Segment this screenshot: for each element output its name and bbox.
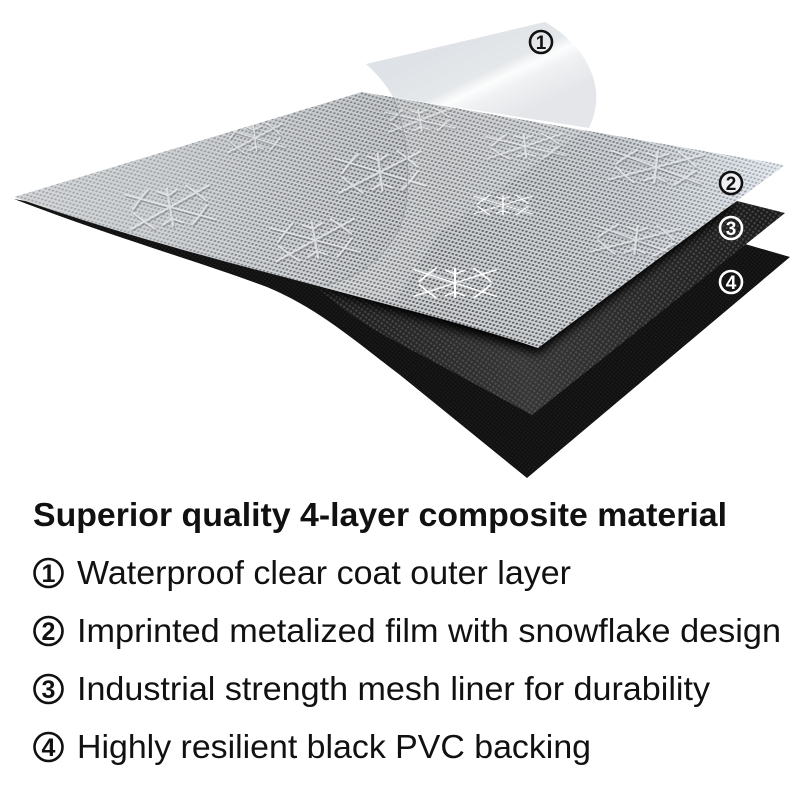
legend item 4: Highly resilient black PVC backing (77, 729, 591, 766)
marker 4 on PVC backing: 4 (726, 273, 737, 294)
legend item 1: 1 (42, 560, 56, 588)
legend item 3: Industrial strength mesh liner for durability (77, 671, 710, 708)
heading: Superior quality 4-layer composite material (33, 496, 727, 533)
layer 3: industrial mesh liner (300, 195, 785, 415)
marker 3 on mesh liner (720, 217, 742, 240)
legend item 2: Imprinted metalized film with snowflake design (77, 613, 781, 650)
marker 3 on mesh liner: 3 (726, 219, 736, 240)
marker 1 on clear film (530, 31, 552, 54)
legend item 4: 4 (42, 734, 56, 762)
legend item 1: Waterproof clear coat outer layer (77, 555, 571, 592)
marker 2 on metalized film (720, 172, 742, 195)
legend item 2: 2 (42, 618, 55, 646)
marker 2 on metalized film: 2 (726, 174, 736, 195)
layer 4: black PVC backing (14, 199, 790, 478)
marker 1 on clear film: 1 (536, 33, 547, 54)
layer 2: metalized film with snowflake design (14, 92, 785, 348)
snowflake imprints (125, 107, 704, 298)
clear film overlay on the sheet (320, 97, 590, 300)
marker 4 on PVC backing (720, 271, 742, 294)
legend item 3: 3 (42, 676, 55, 704)
clear film: raised peel above the sheet (366, 22, 596, 128)
